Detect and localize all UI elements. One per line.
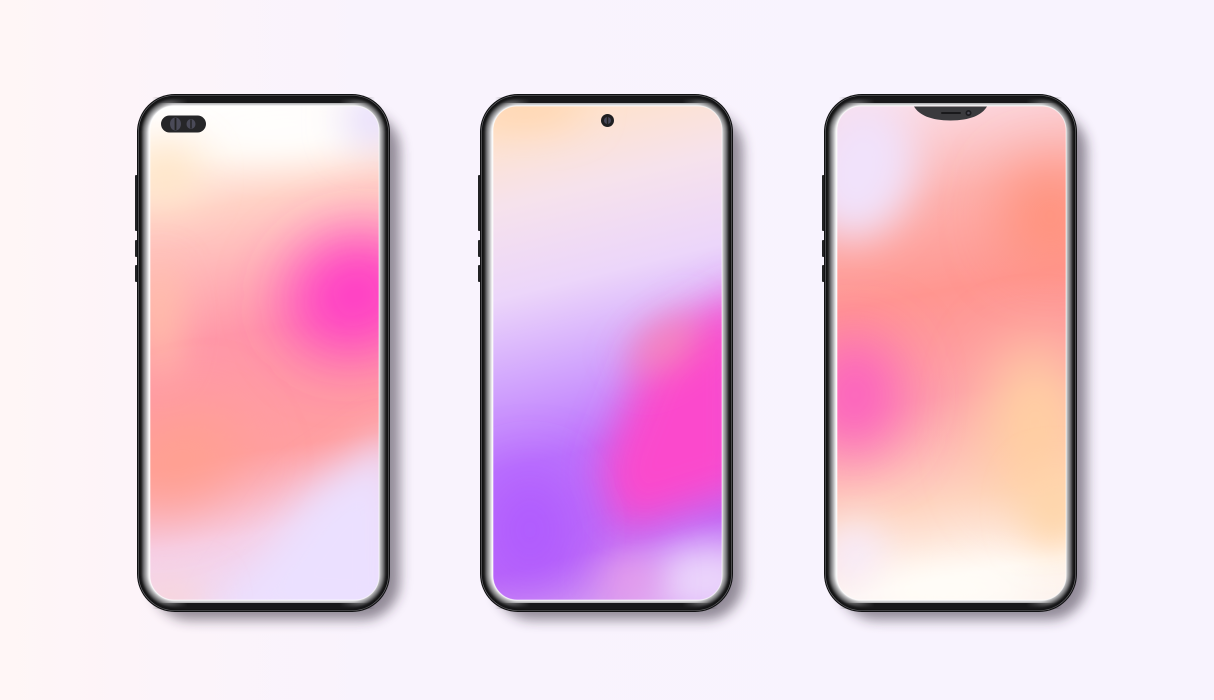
shadow <box>839 112 1087 620</box>
side buttons <box>135 175 138 282</box>
screen gradient <box>493 106 722 600</box>
shadow <box>495 112 743 620</box>
screen edge <box>150 106 379 600</box>
punch-hole camera <box>601 114 614 127</box>
side buttons <box>478 175 480 282</box>
body frame <box>824 94 1077 612</box>
camera pill <box>161 116 206 132</box>
screen edge <box>493 106 722 600</box>
screen gradient <box>150 106 379 600</box>
body frame <box>480 94 733 612</box>
side buttons <box>822 175 824 282</box>
phone 1: dual camera <box>135 94 408 628</box>
phone 3: notch <box>822 94 1096 628</box>
body frame <box>137 94 390 612</box>
screen edge <box>837 106 1066 600</box>
screen gradient <box>837 106 1066 600</box>
notch <box>914 106 987 120</box>
shadow <box>152 112 400 620</box>
phone 2: punch-hole camera <box>465 83 760 620</box>
